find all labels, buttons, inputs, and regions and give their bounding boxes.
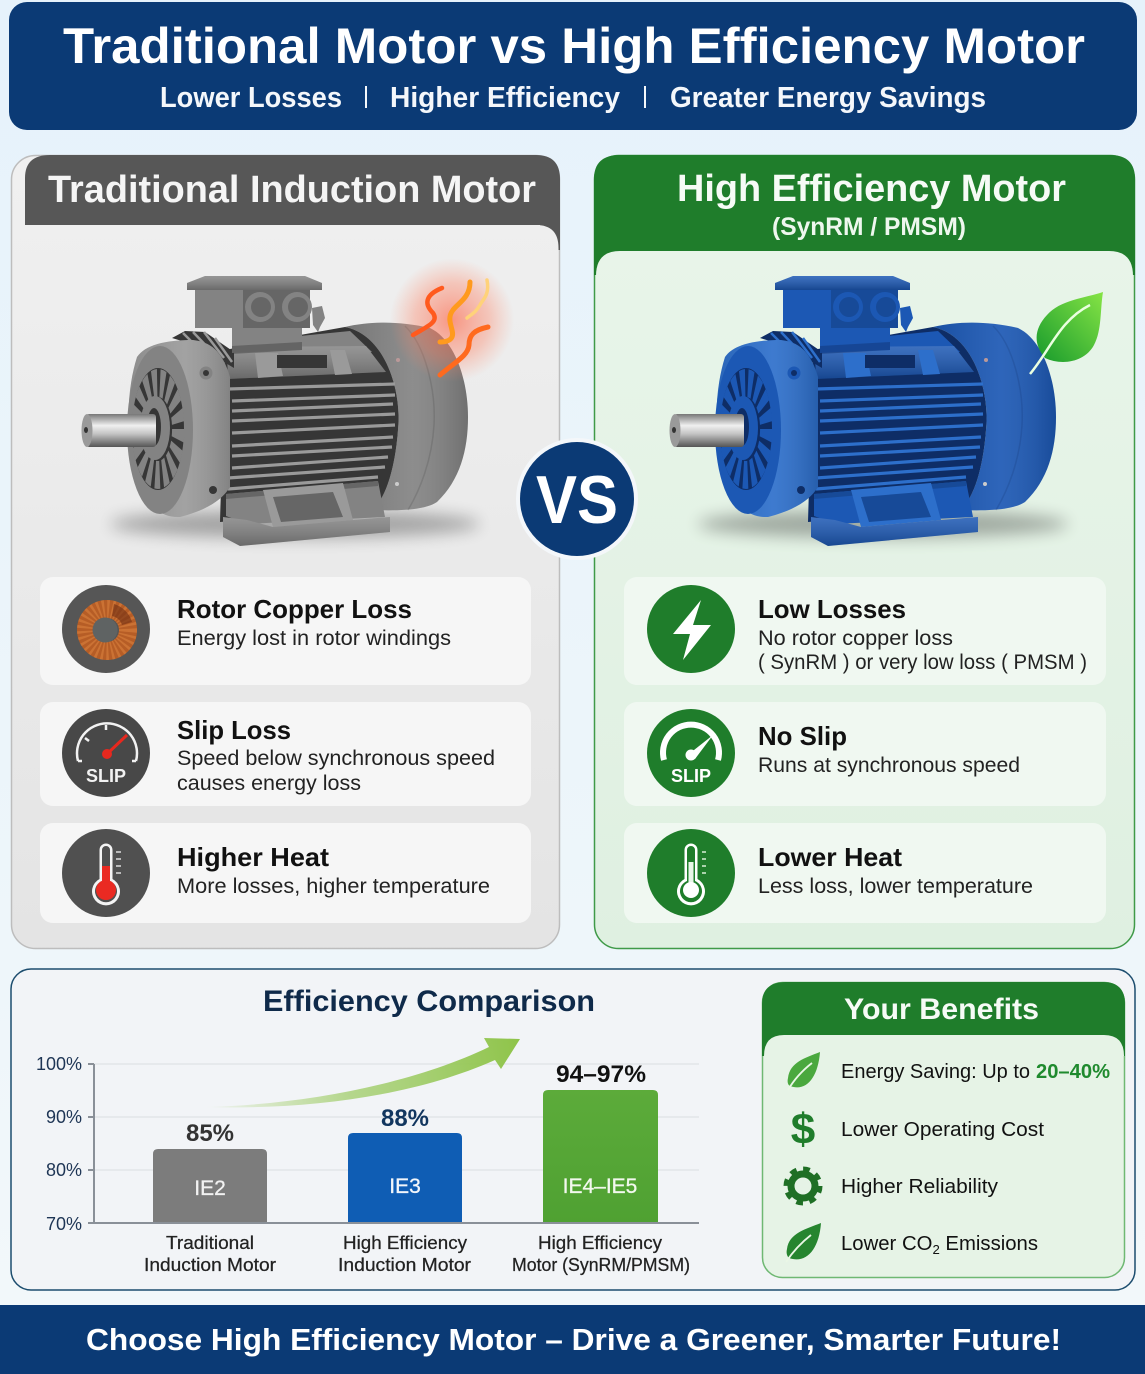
row: no slip: [624, 702, 1106, 806]
benefits heading: Your Benefits: [844, 993, 1039, 1026]
row: no slip: No Slip: [758, 721, 847, 751]
icon: no slip gauge: SLIP: [671, 766, 711, 786]
icon: leaf dark: [786, 1223, 821, 1262]
bar chart: efficiency: [36, 1038, 699, 1275]
bar: IE4-IE5: IE4–IE5: [563, 1175, 637, 1198]
panel header: traditional: [25, 155, 560, 250]
row: lower heat: [624, 823, 1106, 923]
bar: IE2: [153, 1120, 267, 1223]
benefit: emissions: Emissions: [940, 1233, 1038, 1255]
row: low losses: Low Losses: [758, 594, 906, 624]
axis labels: 80%: [46, 1160, 82, 1180]
row: slip loss: [40, 702, 531, 806]
category labels: Induction Motor: [144, 1255, 276, 1275]
bar: IE2: 85%: [186, 1120, 234, 1147]
row: rotor copper loss: [40, 577, 531, 685]
benefit: emissions: 2: [932, 1242, 940, 1257]
motor illustration: grey: [82, 276, 480, 546]
title banner: [9, 2, 1137, 130]
row: low losses: ( SynRM ) or very low loss ( PMSM ): [758, 651, 1087, 674]
growth arrow: [204, 1038, 520, 1107]
bar: IE3: 88%: [381, 1105, 429, 1132]
benefit: energy saving: 20–40%: [1036, 1061, 1110, 1083]
VS badge: [516, 438, 638, 560]
row: higher heat: [40, 823, 531, 923]
benefit: reliability: [786, 1169, 998, 1203]
row: rotor copper loss: Rotor Copper Loss: [177, 594, 412, 624]
row: slip loss: Slip Loss: [177, 715, 291, 745]
panel header: high efficiency: [594, 155, 1135, 275]
icon: green leaf: [1030, 292, 1103, 374]
benefit: operating cost: Lower Operating Cost: [841, 1119, 1044, 1141]
panel header: high efficiency: High Efficiency Motor: [677, 168, 1066, 210]
subtitle: Lower Losses: [160, 82, 342, 114]
icon: slip gauge: [62, 709, 150, 797]
icon: no slip gauge: [647, 709, 735, 797]
VS badge: VS: [536, 462, 618, 538]
row: slip loss: causes energy loss: [177, 772, 361, 795]
category labels: High Efficiency: [538, 1233, 662, 1253]
panel: traditional induction motor: [12, 155, 560, 948]
row: slip loss: Speed below synchronous speed: [177, 747, 495, 770]
panel: high efficiency motor: [594, 155, 1135, 948]
main title: Traditional Motor vs High Efficiency Motor: [63, 18, 1085, 74]
category labels: Traditional: [166, 1233, 254, 1253]
row: low losses: No rotor copper loss: [758, 627, 953, 650]
category labels: [144, 1233, 690, 1275]
benefit: energy saving: Energy Saving: Up to: [841, 1061, 1030, 1083]
panel: your benefits: [762, 982, 1125, 1278]
icon: cool thermometer: [647, 829, 735, 917]
axis labels: 90%: [46, 1107, 82, 1127]
bar: IE3: IE3: [389, 1175, 421, 1198]
row: no slip: Runs at synchronous speed: [758, 754, 1020, 777]
icon: gear: [786, 1169, 820, 1203]
subtitle: Greater Energy Savings: [670, 82, 986, 114]
axis labels: [36, 1054, 82, 1234]
icon: slip gauge: SLIP: [86, 766, 126, 786]
row: higher heat: More losses, higher temperature: [177, 875, 490, 898]
panel header: traditional: Traditional Induction Motor: [48, 169, 536, 211]
panel header: high efficiency: (SynRM / PMSM): [772, 213, 966, 241]
icon: hot thermometer: [62, 829, 150, 917]
benefit: emissions: Lower CO: [841, 1233, 931, 1255]
motor illustration: blue: [670, 276, 1068, 546]
bar: IE4-IE5: 94–97%: [556, 1061, 646, 1088]
bar: IE4-IE5: [543, 1061, 658, 1223]
category labels: Motor (SynRM/PMSM): [512, 1255, 690, 1275]
footer banner: [0, 1305, 1145, 1374]
benefits heading: [762, 982, 1125, 1056]
icon: dollar: $: [791, 1105, 815, 1154]
panel: efficiency comparison and benefits: [11, 969, 1135, 1290]
benefit: reliability: Higher Reliability: [841, 1176, 998, 1198]
subtitle: [160, 82, 986, 114]
row: higher heat: Higher Heat: [177, 842, 329, 872]
category labels: Induction Motor: [338, 1255, 471, 1275]
row: low losses: [624, 577, 1106, 685]
chart heading: Efficiency Comparison: [263, 985, 595, 1018]
footer banner: Choose High Efficiency Motor – Drive a Greener, Smarter Future!: [86, 1322, 1061, 1357]
benefit: emissions: [786, 1223, 1038, 1262]
icon: lightning bolt: [647, 585, 735, 673]
row: rotor copper loss: Energy lost in rotor windings: [177, 627, 451, 650]
bar: IE2: IE2: [194, 1177, 226, 1200]
row: lower heat: Lower Heat: [758, 842, 902, 872]
icon: copper coil: [62, 585, 150, 673]
subtitle: Higher Efficiency: [390, 82, 620, 114]
category labels: High Efficiency: [343, 1233, 467, 1253]
benefit: operating cost: [791, 1105, 1044, 1154]
heat waves: [390, 258, 514, 382]
benefit: energy saving: [788, 1052, 1110, 1090]
axis labels: 100%: [36, 1054, 82, 1074]
bar: IE3: [348, 1105, 462, 1223]
axis labels: 70%: [46, 1214, 82, 1234]
row: lower heat: Less loss, lower temperature: [758, 875, 1033, 898]
icon: leaf: [788, 1052, 820, 1090]
